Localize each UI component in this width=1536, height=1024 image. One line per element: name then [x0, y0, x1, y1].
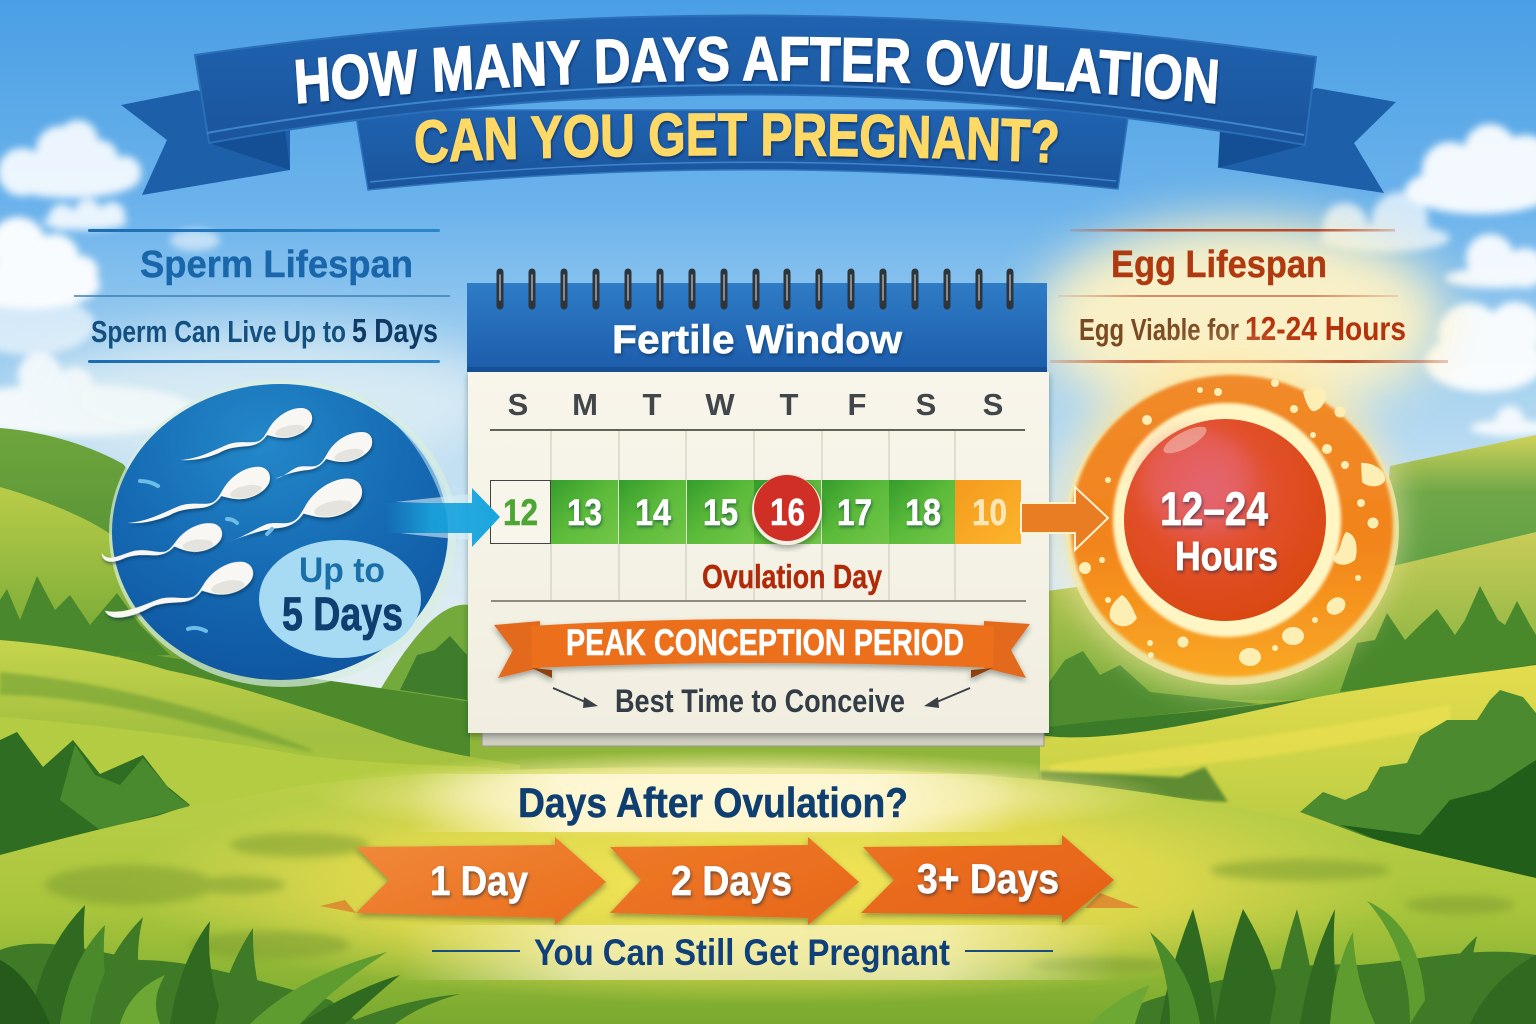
callout: up to 5 days — [259, 540, 421, 658]
arrow: 3+ days — [861, 835, 1114, 923]
panel: sperm circle — [101, 379, 458, 687]
weekday labels: T — [643, 387, 662, 422]
ribbon: peak conception period — [494, 619, 1030, 678]
icon: sperm 3 — [127, 467, 270, 523]
egg duration — [1160, 482, 1278, 579]
day 10 — [955, 480, 1021, 544]
title banner — [121, 14, 1396, 195]
banner main band — [195, 15, 1316, 145]
day numbers: 13 — [567, 492, 602, 533]
day numbers: 15 — [703, 492, 738, 533]
icon: sperm 6 — [105, 557, 253, 622]
weekday labels: T — [780, 387, 799, 422]
cloud: small mid — [170, 229, 220, 251]
panel: egg lifespan header — [1050, 229, 1448, 363]
weekday labels: S — [983, 387, 1003, 422]
cloud: right 3 — [1445, 234, 1536, 288]
arrow: 2 days — [610, 837, 859, 925]
egg duration: 12–24 — [1160, 482, 1268, 535]
ovulation day marker — [752, 475, 822, 545]
title line 2: CAN YOU GET PREGNANT? — [415, 112, 1060, 166]
calendar paper — [468, 372, 1049, 733]
arrow: calendar to egg — [1021, 487, 1108, 550]
background: sky — [0, 0, 1536, 700]
arrow: 2 days: 2 Days — [671, 857, 792, 904]
grass patches — [45, 833, 1515, 973]
foreground grass — [0, 901, 1536, 1024]
arrow: 1 day — [356, 837, 606, 925]
left hills — [0, 428, 210, 700]
section: days after ovulation — [320, 774, 1140, 980]
panel: egg illustration — [1038, 328, 1418, 708]
panel: calendar — [467, 272, 1049, 746]
foreground hill — [0, 767, 1536, 1024]
footer backdrop — [400, 925, 1120, 980]
callout: up to 5 days: Up to — [299, 551, 385, 590]
text: sperm can live: Sperm Can Live Up to — [91, 314, 346, 349]
weekday labels: F — [848, 387, 866, 422]
right bushes — [1300, 690, 1536, 885]
weekday labels: S — [916, 387, 936, 422]
banner left tail — [121, 90, 290, 195]
grass: left clump — [0, 905, 460, 1024]
day row: 10 — [972, 492, 1007, 533]
banner left fold — [209, 128, 290, 170]
background: landscape — [0, 428, 1536, 1024]
calendar title: Fertile Window — [612, 318, 903, 362]
egg speckles — [1079, 379, 1385, 666]
text: egg viable — [1079, 310, 1406, 347]
text: you can still get pregnant: You Can Still Get Pregnant — [534, 932, 950, 973]
text: egg viable: Egg Viable for — [1079, 312, 1239, 347]
day numbers: 17 — [837, 492, 872, 533]
cloud: upper left — [0, 120, 141, 198]
icon: sperm 5 — [101, 510, 223, 575]
weekday labels: S — [508, 387, 528, 422]
banner lower band — [355, 110, 1129, 190]
heading: sperm lifespan: Sperm Lifespan — [140, 244, 413, 286]
cloud: right 5 — [1470, 406, 1536, 436]
egg — [1124, 419, 1326, 621]
text: best time to conceive: Best Time to Conceive — [615, 683, 905, 719]
arrow: 1 day: 1 Day — [430, 857, 529, 904]
day row: 12 — [503, 492, 538, 533]
heading backdrop — [410, 774, 1020, 832]
weekday labels: W — [705, 387, 735, 422]
cloud: mid left — [0, 217, 100, 355]
ribbon: peak conception period: PEAK CONCEPTION PERIOD — [566, 622, 964, 663]
panel: sperm lifespan header — [74, 229, 450, 363]
cloud: small left — [43, 199, 127, 230]
calendar rings — [500, 272, 1010, 306]
cloud: right 4 — [1425, 302, 1536, 392]
label: ovulation day: Ovulation Day — [702, 558, 883, 595]
arrow: sperm to calendar — [385, 488, 500, 547]
day 12 — [490, 480, 550, 544]
weekday labels — [508, 387, 1003, 422]
callout: up to 5 days: 5 Days — [282, 587, 403, 640]
egg duration: Hours — [1175, 533, 1278, 579]
calendar page stack — [482, 728, 1044, 746]
icon: sperm 4 — [228, 478, 362, 542]
right hills — [1380, 435, 1536, 600]
title line 1: HOW MANY DAYS AFTER OVULATION — [295, 36, 1220, 107]
arrow: 3+ days: 3+ Days — [917, 855, 1059, 902]
heading: days after ovulation: Days After Ovulation? — [518, 779, 908, 826]
foreground glow — [120, 765, 1400, 1005]
cloud: right 2 — [1320, 192, 1450, 252]
cloud: lower left — [0, 353, 195, 436]
day row — [490, 475, 1021, 545]
calendar grid lines — [551, 430, 955, 600]
ovulation day marker: 16 — [770, 492, 805, 534]
icon: sperm 2 — [275, 432, 372, 479]
sky lightening — [30, 220, 1445, 470]
text: sperm can live: 5 Days — [352, 312, 438, 349]
calendar header — [467, 283, 1047, 372]
small bubbles — [140, 481, 272, 631]
heading: egg lifespan: Egg Lifespan — [1111, 244, 1327, 286]
left dark trees — [0, 732, 190, 860]
day numbers: 18 — [905, 492, 941, 533]
text: egg viable: 12-24 Hours — [1245, 310, 1406, 347]
banner right fold — [1218, 130, 1305, 168]
weekday labels: M — [572, 387, 598, 422]
day numbers — [567, 492, 941, 533]
clouds — [0, 120, 1536, 436]
grass: right clump — [1090, 901, 1536, 1024]
days 13 to 18 — [551, 480, 955, 544]
banner right tail — [1220, 88, 1396, 193]
day numbers: 14 — [635, 492, 671, 533]
cloud: upper right — [1405, 124, 1536, 214]
icon: sperm 1 — [180, 408, 312, 460]
arrow shadow accents — [320, 893, 1140, 913]
